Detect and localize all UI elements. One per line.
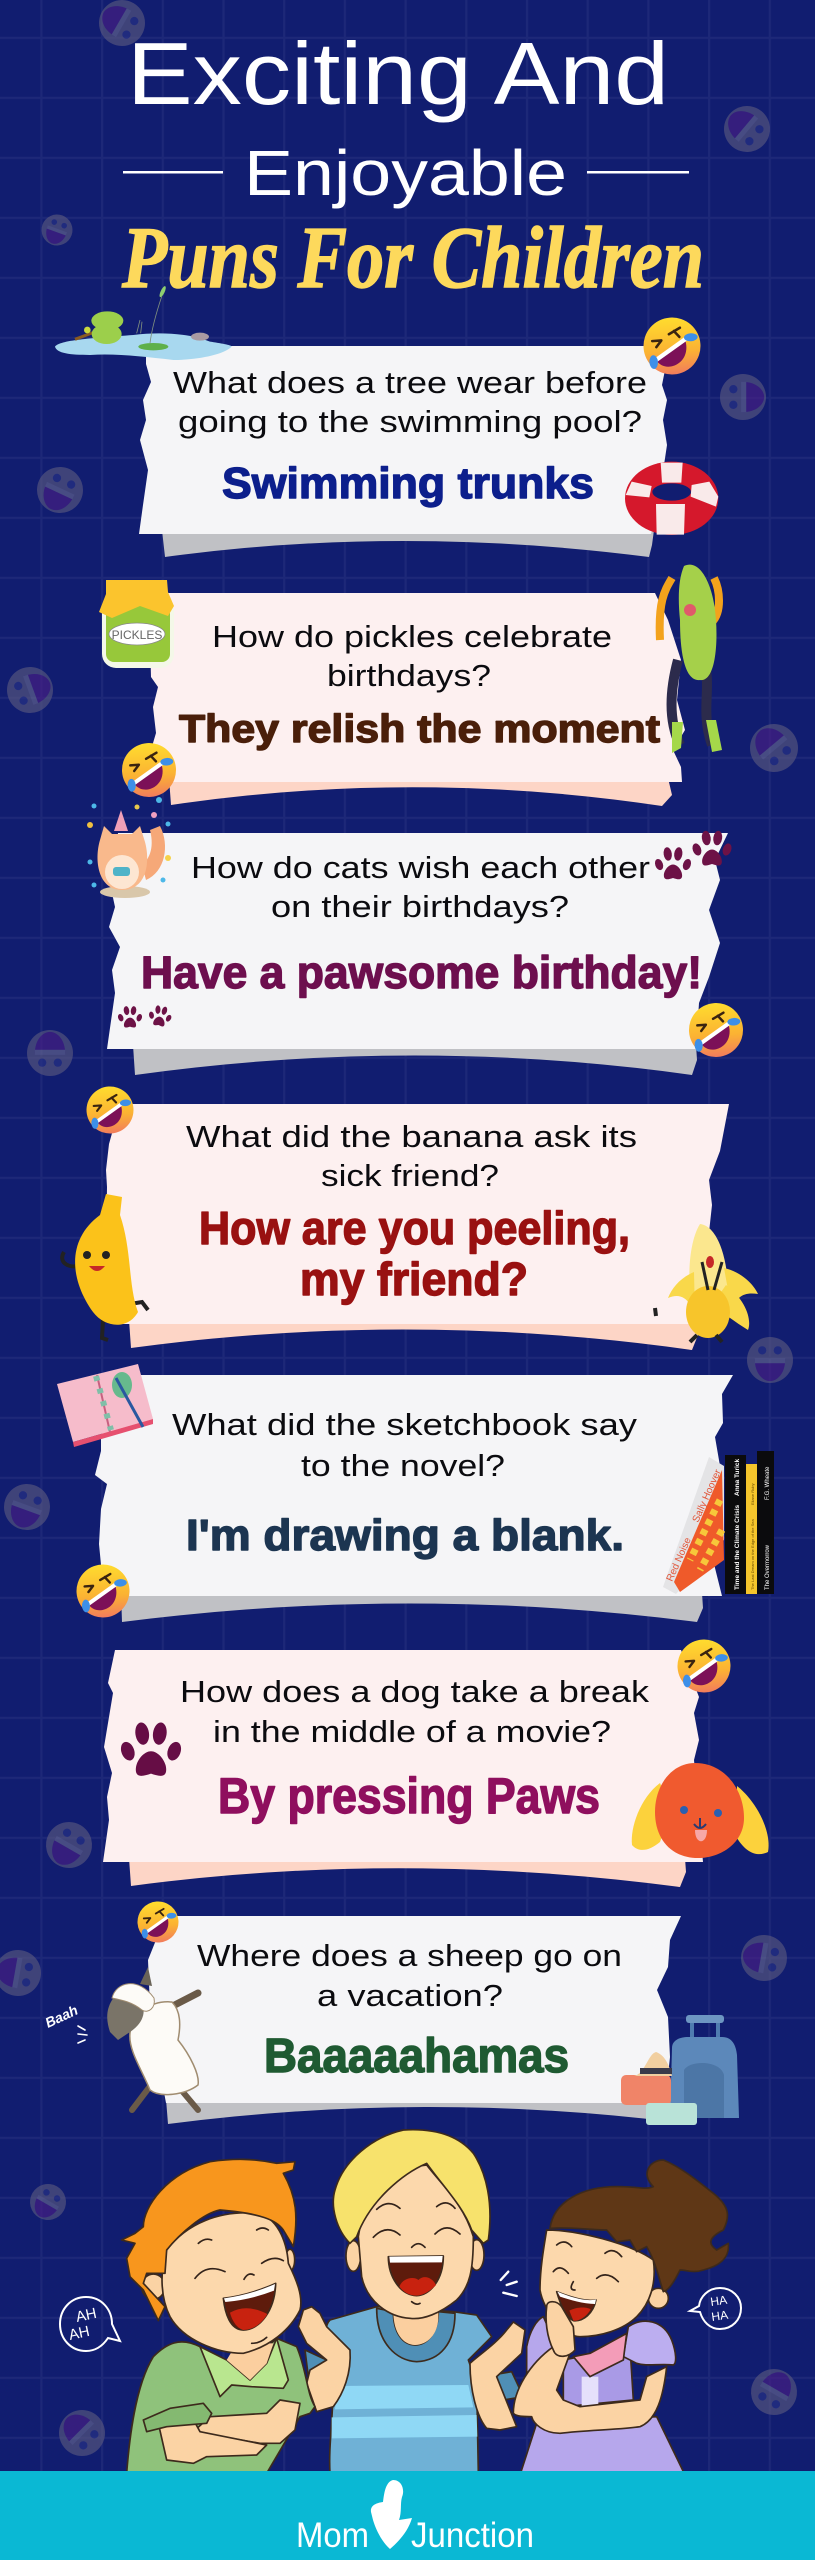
icon: laughing emoji [642,316,702,376]
question: to the novel? [301,1448,505,1483]
icon: sound marks [78,2026,87,2043]
panel: dog pun [103,1638,769,1887]
panel: pickle pun [99,565,722,806]
question [197,1938,622,2013]
icon: dabbing sheep [107,1967,198,2110]
icon: books [663,1451,774,1594]
answer: my friend? [300,1253,528,1305]
logo: MomJunction: Mom [296,2516,369,2555]
speech bubble: AH AH: AH [67,2323,91,2344]
icon: books: F.G. Wheate [765,1466,771,1500]
question: Where does a sheep go on [197,1938,622,1973]
question [173,365,647,439]
question: What did the banana ask its [186,1119,637,1154]
answer: Swimming trunks [222,459,594,508]
title line: Puns For Children: Puns For Children [121,210,704,307]
icon: pickle jar: PICKLES [112,628,162,642]
answer: How are you peeling, [199,1202,630,1254]
icon: peeled banana [655,1224,758,1342]
icon: laughing emoji [75,1563,131,1619]
left boy [122,2159,315,2473]
question: on their birthdays? [271,889,569,924]
paper shadow strip [121,1593,703,1622]
icon: lifebuoy [625,462,718,535]
icon: books: The Overmorrow [765,1544,771,1590]
icon: books: Anna Turick [734,1459,741,1496]
torn paper [103,1650,703,1862]
icon: books: Eliane Ruby [750,1483,755,1505]
title line: Exciting And: Exciting And [127,24,669,123]
footer band [0,2471,815,2560]
question: sick friend? [321,1158,499,1193]
speech bubble: AH AH: AH [74,2305,98,2326]
icon: pickle jar [99,580,174,668]
question: How does a dog take a break [180,1674,650,1709]
question [180,1674,650,1749]
illustration: laughing children [60,2130,741,2475]
icon: books: Sally Hoover [691,1467,724,1524]
question: What did the sketchbook say [172,1407,638,1442]
question: birthdays? [327,658,491,693]
question [186,1119,637,1193]
middle boy [298,2130,525,2473]
panel: banana pun [62,1085,758,1350]
panel: cat pun [87,797,745,1075]
question: What does a tree wear before [173,365,647,400]
logo: MomJunction: Junction [411,2516,534,2555]
paper shadow strip [162,530,654,557]
icon: party cat [87,797,171,898]
icon: books: Time and the Climate Crisis [734,1504,741,1590]
icon: paw prints [117,830,733,1028]
torn paper [106,1104,729,1324]
paper shadow strip [166,2099,695,2124]
laugh marks [501,2272,517,2296]
icon: sketchbook [57,1364,153,1447]
torn paper [139,346,671,534]
answer: I'm drawing a blank. [186,1511,624,1560]
icon: frog on pond [55,285,232,360]
icon: paw print [119,1722,183,1776]
question: How do cats wish each other [191,850,650,885]
icon: laughing emoji [85,1085,135,1135]
paper shadow strip [129,1858,686,1887]
paper shadow strip [169,778,672,806]
speech bubble: HA HA [690,2288,741,2329]
icon: dog face [632,1763,769,1858]
title line: Enjoyable: Enjoyable [244,137,567,209]
panel: sketchbook pun [57,1364,774,1622]
answer: They relish the moment [179,708,660,751]
question [191,850,650,924]
answer: Baaaaahamas [264,2030,569,2083]
icon: luggage [621,2015,739,2125]
icon: laughing emoji [120,741,178,799]
torn paper [148,1916,681,2103]
panel: tree pun [55,285,718,557]
girl [513,2160,728,2475]
speech bubble: AH AH [60,2297,120,2351]
speech bubble: HA HA: HA [709,2293,728,2309]
title [121,24,704,307]
icon: laughing emoji [676,1638,732,1694]
icon: dancing banana [62,1194,148,1340]
answer: By pressing Paws [218,1768,600,1824]
question: in the middle of a movie? [213,1714,611,1749]
answer: Have a pawsome birthday! [141,947,702,998]
question [172,1407,638,1483]
panel: sheep pun [43,1900,739,2125]
torn paper [95,1375,733,1596]
question: going to the swimming pool? [178,404,642,439]
label: Baah: Baah [43,2002,80,2031]
icon: books: The Last Dream on the Edge of the Sea [750,1519,755,1590]
torn paper [148,593,685,782]
answer [199,1202,630,1305]
torn paper [107,833,728,1049]
speech bubble: HA HA: HA [710,2308,729,2324]
question [212,619,612,693]
icon: laughing emoji [136,1900,180,1944]
question: How do pickles celebrate [212,619,612,654]
icon: pickle character [660,565,722,753]
icon: books: Red Noise [665,1536,694,1583]
paper shadow strip [133,1045,697,1075]
icon: laughing emoji [687,1001,745,1059]
logo: MomJunction [296,2480,534,2555]
paper shadow strip [129,1320,698,1350]
question: a vacation? [317,1978,503,2013]
